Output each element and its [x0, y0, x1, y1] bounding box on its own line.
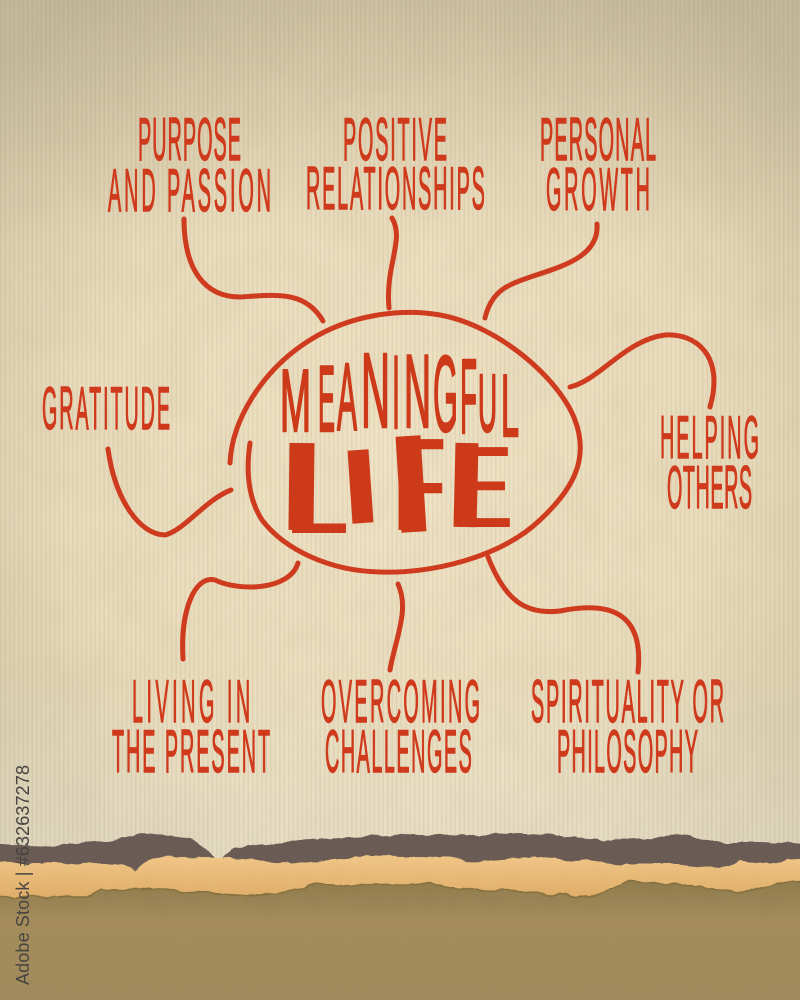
label: personal growth: PERSONAL [540, 108, 656, 173]
label: overcoming challenges: CHALLENGES [325, 720, 472, 785]
title: MEANINGFUL: G [433, 333, 458, 454]
label: personal growth: GROWTH [546, 158, 650, 223]
spoke: spirituality or philosophy [488, 557, 639, 672]
title: LIFE: I [356, 432, 370, 544]
label: helping others: OTHERS [667, 456, 752, 521]
title: LIFE: F [391, 411, 447, 558]
spoke: overcoming challenges [390, 584, 403, 670]
watermark: Adobe Stock: Adobe Stock | #632637278 [13, 765, 33, 985]
central oval [230, 312, 580, 572]
title: MEANINGFUL: N [404, 334, 431, 450]
label: living in the present [112, 670, 270, 785]
label: positive relationships: RELATIONSHIPS [306, 157, 485, 222]
label: purpose and passion: AND PASSION [108, 159, 271, 224]
title: MEANINGFUL: F [460, 338, 477, 456]
infographic: meaningful life mind map: L [501, 356, 519, 455]
label: living in the present: THE PRESENT [112, 720, 270, 785]
title: MEANINGFUL: N [361, 332, 390, 450]
label: overcoming challenges [321, 670, 480, 785]
label: personal growth [540, 108, 656, 223]
paper layer: tan torn sheet [0, 881, 800, 1000]
title: MEANINGFUL [280, 332, 519, 456]
label: overcoming challenges: OVERCOMING [321, 670, 480, 735]
label: positive relationships: POSITIVE [343, 108, 447, 173]
spoke: purpose and passion [184, 219, 323, 321]
label: positive relationships [306, 108, 485, 222]
title: LIFE: L [282, 421, 350, 560]
title: MEANINGFUL: M [280, 351, 311, 450]
paper layer: dark grey torn strip [0, 833, 800, 875]
label: purpose and passion: PURPOSE [138, 108, 241, 173]
title: MEANINGFUL: U [478, 358, 497, 449]
spoke: personal growth [485, 224, 597, 318]
label: living in the present: LIVING IN [132, 670, 250, 735]
label: spirituality or philosophy [531, 670, 724, 785]
title: MEANINGFUL: I [392, 335, 400, 451]
label: helping others [660, 406, 759, 521]
label: spirituality or philosophy: SPIRITUALITY OR [531, 670, 724, 735]
label: gratitude: GRATITUDE [42, 377, 170, 442]
title: LIFE [282, 411, 514, 560]
spoke: gratitude [108, 449, 231, 535]
title: MEANINGFUL: E [318, 346, 335, 451]
label: spirituality or philosophy: PHILOSOPHY [557, 720, 698, 785]
title: MEANINGFUL: A [337, 344, 357, 451]
label: helping others: HELPING [660, 406, 759, 471]
spoke: helping others [570, 335, 714, 407]
spoke: living in the present [183, 563, 298, 659]
label: purpose and passion [108, 108, 271, 224]
spoke: positive relationships [388, 218, 396, 308]
title: LIFE: E [449, 422, 514, 552]
paper layer: orange torn strip [0, 856, 800, 905]
